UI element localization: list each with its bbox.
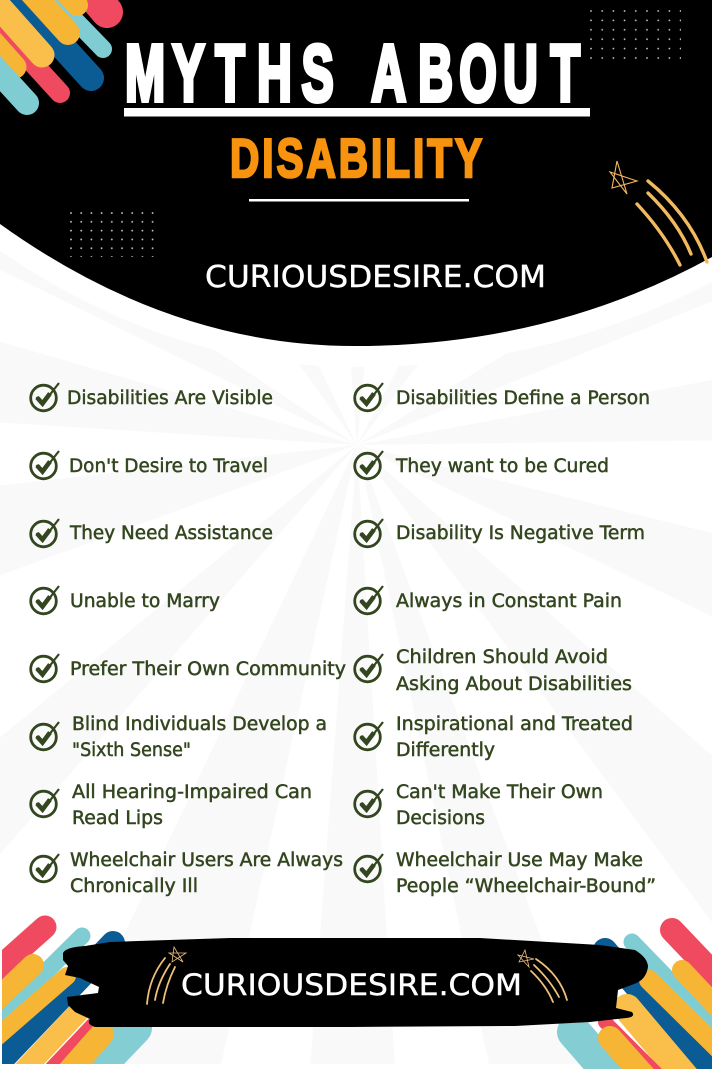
footer url: CURIOUSDESIRE.COM [181, 968, 522, 1002]
item: Asking About Disabilities [396, 674, 632, 695]
item: Don't Desire to Travel [69, 456, 268, 477]
item: Disabilities Define a Person [396, 388, 650, 409]
icon: shooting star right [518, 950, 567, 1002]
item: Chronically Ill [70, 876, 198, 897]
list: right column [355, 383, 656, 897]
item [355, 383, 650, 411]
item: Disability Is Negative Term [396, 523, 645, 544]
item [355, 647, 632, 695]
item: Decisions [396, 808, 485, 829]
item [31, 586, 220, 614]
subtitle rule [249, 199, 469, 202]
item: All Hearing-Impaired Can [72, 782, 312, 803]
item: Disabilities Are Visible [67, 388, 273, 409]
icon: colourful stripes top left [0, 0, 107, 103]
icon: shooting star left [147, 947, 186, 1004]
item: Prefer Their Own Community [70, 659, 346, 680]
item: Unable to Marry [70, 591, 220, 612]
item [355, 451, 609, 479]
item [31, 782, 312, 829]
item [355, 714, 633, 761]
item: They want to be Cured [395, 456, 609, 477]
item [31, 714, 327, 761]
list: left column [31, 383, 346, 897]
title: MYTHS ABOUT [125, 28, 580, 117]
item: Wheelchair Use May Make [396, 850, 643, 871]
panel: black header [0, 0, 712, 346]
item [355, 782, 603, 829]
item: Can't Make Their Own [396, 782, 603, 803]
item [31, 383, 273, 411]
item [31, 519, 273, 547]
item: Differently [396, 740, 495, 761]
item: Always in Constant Pain [396, 591, 622, 612]
item: "Sixth Sense" [72, 740, 191, 761]
icon: stripes bottom left [0, 927, 135, 1069]
item [355, 586, 622, 614]
item: Wheelchair Users Are Always [70, 850, 343, 871]
item [31, 654, 346, 682]
dot grid top right [590, 10, 681, 59]
item [31, 451, 268, 479]
item: Children Should Avoid [396, 647, 608, 668]
subtitle: DISABILITY [230, 127, 485, 189]
item [355, 850, 656, 897]
icon: shooting star [610, 161, 707, 265]
item: Inspirational and Treated [396, 714, 633, 735]
item: People “Wheelchair-Bound” [396, 876, 656, 897]
item [31, 850, 343, 897]
item: Read Lips [72, 808, 163, 829]
item [355, 519, 645, 547]
title underline [124, 108, 590, 116]
panel: black brush banner [63, 938, 648, 1027]
website url: CURIOUSDESIRE.COM [205, 260, 546, 295]
icon: stripes bottom right [574, 930, 712, 1069]
dot grid left [70, 212, 154, 257]
item: Blind Individuals Develop a [72, 714, 327, 735]
item: They Need Assistance [69, 523, 273, 544]
